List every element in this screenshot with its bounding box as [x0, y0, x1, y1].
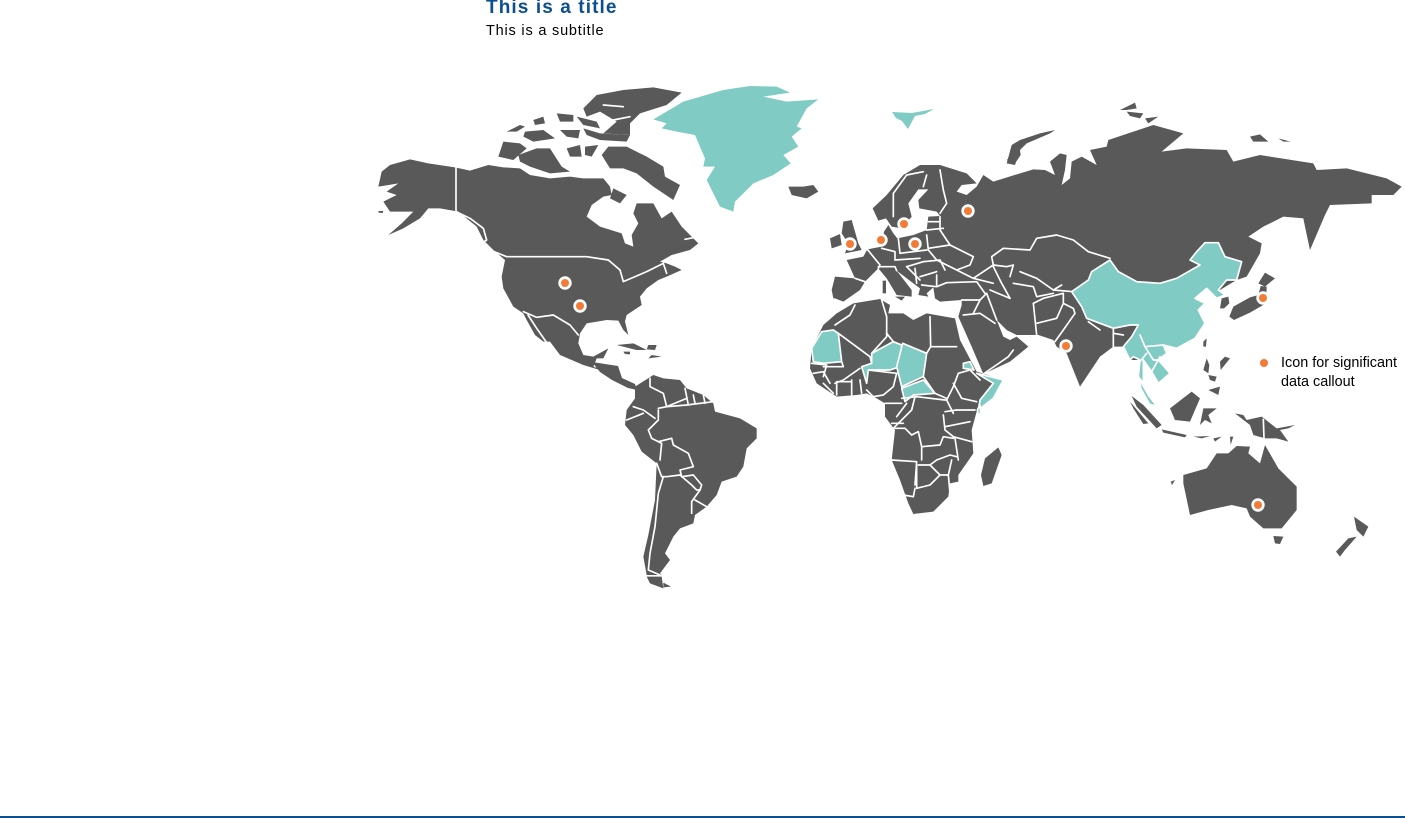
africa landmass [810, 299, 1003, 514]
legend text: Icon for significant [1281, 355, 1397, 371]
oceania and indonesia [1130, 358, 1368, 557]
north america borders [456, 105, 698, 373]
china and southeast asia [1072, 243, 1242, 383]
central america [592, 362, 637, 390]
new zealand [1354, 517, 1368, 537]
british isles [842, 220, 862, 253]
legend [1260, 355, 1397, 390]
footer rule [0, 816, 1405, 818]
south america [625, 375, 1002, 588]
africa borders [812, 300, 980, 497]
subtitle: This is a subtitle [486, 23, 604, 39]
north america [378, 86, 818, 378]
highlighted african countries [812, 330, 1003, 415]
eurasia landmass [832, 125, 1402, 387]
callout markers [558, 204, 1270, 512]
legend text [1281, 355, 1397, 390]
eurasia and africa [810, 125, 1402, 514]
iceland [788, 185, 818, 198]
japan and far east islands [1007, 103, 1291, 347]
asian islands [1220, 357, 1230, 370]
madagascar [981, 447, 1002, 486]
australia [1183, 445, 1297, 528]
greenland [653, 86, 818, 212]
svalbard [892, 109, 934, 129]
legend text: data callout [1281, 374, 1355, 390]
europe and asia borders [855, 170, 1123, 374]
legend icon [1260, 359, 1268, 367]
new guinea [1235, 413, 1295, 442]
